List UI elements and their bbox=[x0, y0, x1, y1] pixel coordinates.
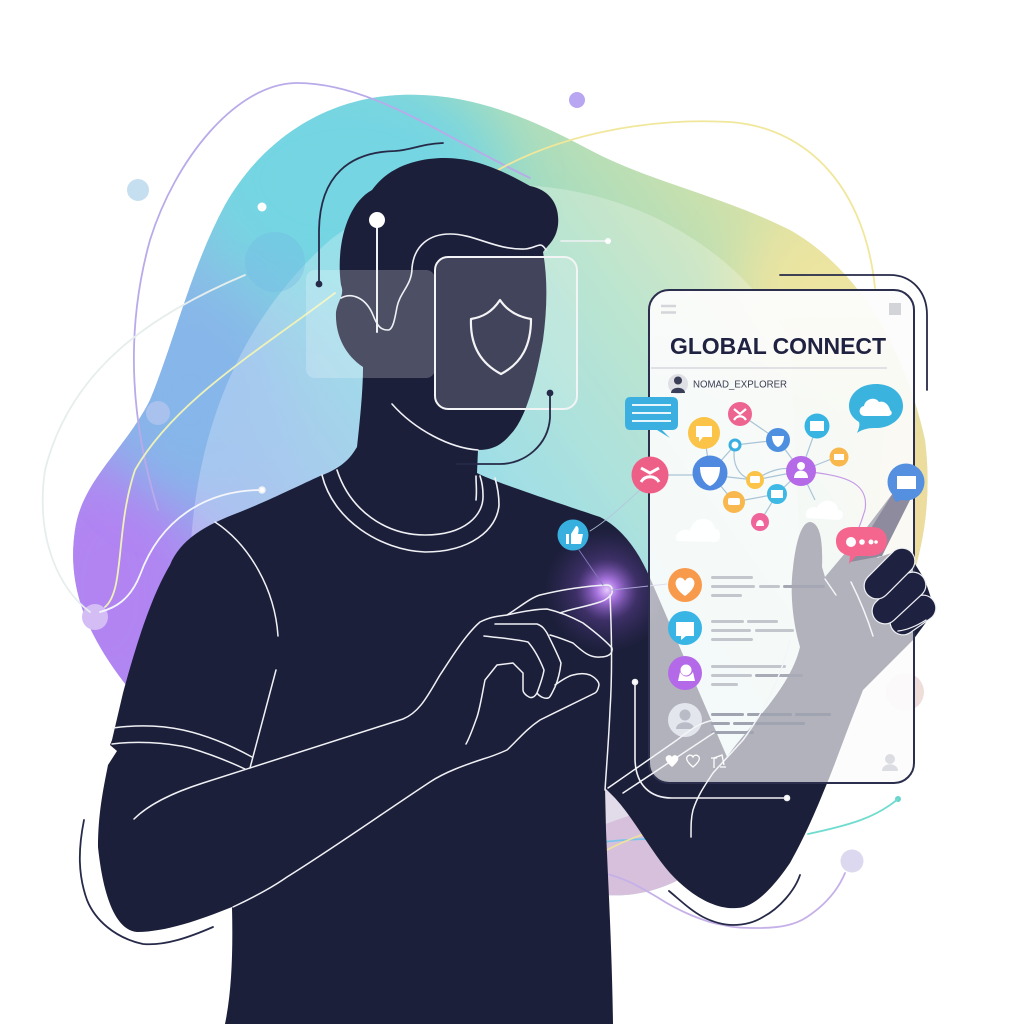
faint clouds on phone bbox=[676, 501, 843, 542]
feed item: ghost avatar bbox=[668, 703, 831, 737]
phone square icon bbox=[889, 303, 901, 315]
pointing finger seen through the phone bbox=[850, 493, 910, 562]
head connector dots bbox=[369, 212, 611, 244]
head and neck line art bbox=[322, 222, 606, 552]
glass panel: left bbox=[306, 270, 435, 378]
node: blue ring bbox=[730, 440, 740, 450]
thin orbit lines bbox=[43, 83, 898, 928]
node: small orange bbox=[830, 448, 848, 466]
icon: blue message bubble bbox=[888, 464, 924, 502]
node: pink bbox=[728, 402, 752, 426]
node: purple person bbox=[786, 456, 816, 486]
icon: cloud speech bubble bbox=[849, 384, 903, 433]
node: blue rectangle bbox=[804, 414, 830, 438]
node: yellow chat bbox=[688, 417, 720, 449]
connector line with dots bbox=[259, 487, 790, 800]
arm and hand line art bbox=[112, 522, 612, 907]
profile name: NOMAD_EXPLORER bbox=[693, 378, 787, 390]
node: yellow bbox=[746, 471, 764, 489]
white lines over phone bbox=[608, 579, 873, 837]
panel: phone glass bbox=[649, 290, 914, 783]
node: orange bbox=[723, 491, 745, 513]
header divider bbox=[651, 367, 887, 369]
feed item: heart bbox=[668, 568, 825, 602]
background colour blob bbox=[73, 94, 928, 896]
profile avatar bbox=[668, 374, 688, 394]
node: teal bbox=[767, 484, 787, 504]
feed item: person bbox=[668, 656, 803, 690]
feed item: chat bbox=[668, 611, 794, 645]
decorative circles bbox=[82, 92, 924, 872]
icon: shield bbox=[471, 300, 531, 374]
heading: Global Connect: GLOBAL CONNECT bbox=[670, 333, 886, 359]
dark connector lines bbox=[80, 143, 927, 944]
bottom action icons bbox=[666, 754, 898, 771]
feed list bbox=[668, 568, 831, 737]
network links bbox=[650, 414, 866, 530]
icon: thumbs up bbox=[558, 520, 588, 550]
glass panel: shield card bbox=[435, 257, 577, 409]
network diagram bbox=[632, 402, 866, 531]
tablet backing light bbox=[649, 290, 914, 783]
node: big blue bbox=[692, 456, 728, 490]
node: pink small bbox=[751, 513, 769, 531]
purple touch glow bbox=[552, 535, 648, 645]
phone menu icon bbox=[661, 306, 676, 312]
node: big pink bbox=[632, 456, 668, 494]
person silhouette bbox=[98, 158, 935, 1024]
icon: pink typing bubble bbox=[836, 527, 887, 564]
node: blue shield bbox=[766, 428, 790, 452]
icon: chat bubble with text lines bbox=[625, 397, 678, 438]
hand: dark fingers bbox=[877, 561, 926, 631]
